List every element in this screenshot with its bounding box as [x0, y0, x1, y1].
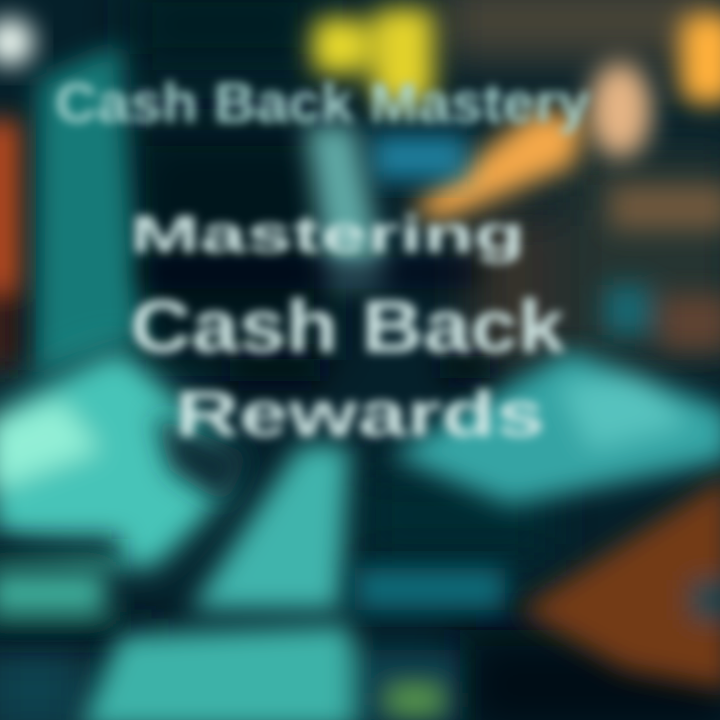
- warm lights, right: [588, 14, 720, 158]
- wooden table, lower right: [520, 475, 720, 690]
- dark bands behind title lines: [140, 265, 490, 382]
- title line 4: Rewards: [175, 378, 545, 450]
- teal strip, centre: [190, 445, 350, 610]
- pale teal glow, centre: [305, 125, 385, 285]
- title line 2: Mastering: [130, 206, 525, 264]
- teal strip, lower right of centre: [355, 568, 505, 610]
- teal paper, right: [390, 350, 720, 505]
- red panel, far left: [0, 120, 20, 370]
- yellow sign, top centre: [312, 8, 434, 104]
- teal paper, bottom: [80, 625, 460, 720]
- title line 3: Cash Back: [130, 285, 566, 368]
- orange streak: [410, 110, 585, 222]
- brown shelves, right: [605, 185, 720, 350]
- teal column, left: [35, 45, 140, 375]
- white light, top left: [0, 18, 34, 66]
- dark object, lower left: [0, 415, 250, 644]
- blue patch centre: [372, 135, 467, 180]
- title line 1: Cash Back Mastery: [55, 71, 590, 134]
- teal paper, left: [0, 355, 230, 560]
